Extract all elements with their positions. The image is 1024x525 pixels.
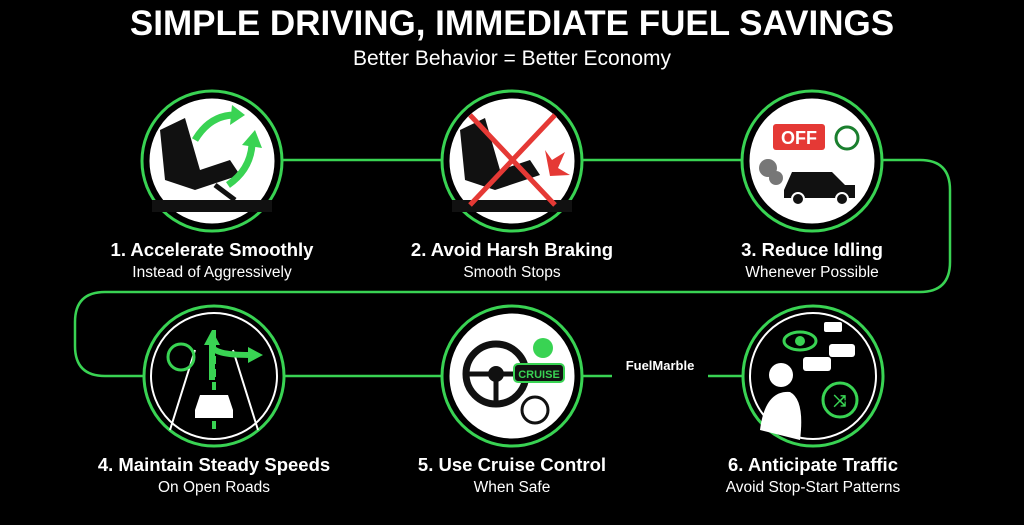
label 4: 4. Maintain Steady Speeds — [98, 454, 330, 475]
icon: driver, eye, cars, shuffle: ⤨ — [834, 393, 847, 410]
subtitle: Better Behavior = Better Economy — [353, 47, 672, 70]
brand: FuelMarble: FuelMarble — [626, 358, 694, 373]
label 3: 3. Reduce Idling — [741, 239, 883, 260]
icon: driver, eye, cars, shuffle — [760, 322, 857, 440]
step 4: On Open Roads — [158, 479, 270, 496]
icon: off sign, timer, car: OFF — [781, 128, 817, 148]
icon: steering wheel, cruise — [466, 338, 564, 423]
title: SIMPLE DRIVING, IMMEDIATE FUEL SAVINGS — [130, 4, 894, 43]
step 2 — [411, 91, 613, 281]
step 3 — [741, 91, 883, 281]
step 5 — [418, 306, 606, 496]
label 1: 1. Accelerate Smoothly — [111, 239, 314, 260]
step 1: Instead of Aggressively — [132, 264, 292, 281]
step 6: Avoid Stop-Start Patterns — [726, 479, 901, 496]
step 2: Smooth Stops — [463, 264, 561, 281]
icon: foot braking crossed — [452, 115, 572, 212]
step 4 — [98, 306, 330, 496]
icon: foot on pedal — [152, 105, 272, 212]
icon: road, arrows, car, gauge — [168, 330, 263, 430]
icon: steering wheel, cruise: CRUISE — [518, 369, 560, 381]
step 5: When Safe — [474, 479, 550, 496]
step 6 — [726, 306, 901, 496]
icon: off sign, timer, car — [759, 124, 858, 205]
label 6: 6. Anticipate Traffic — [728, 454, 898, 475]
step 3: Whenever Possible — [745, 264, 879, 281]
label 2: 2. Avoid Harsh Braking — [411, 239, 613, 260]
label 5: 5. Use Cruise Control — [418, 454, 606, 475]
step 1 — [111, 91, 314, 281]
connector path — [75, 160, 950, 376]
